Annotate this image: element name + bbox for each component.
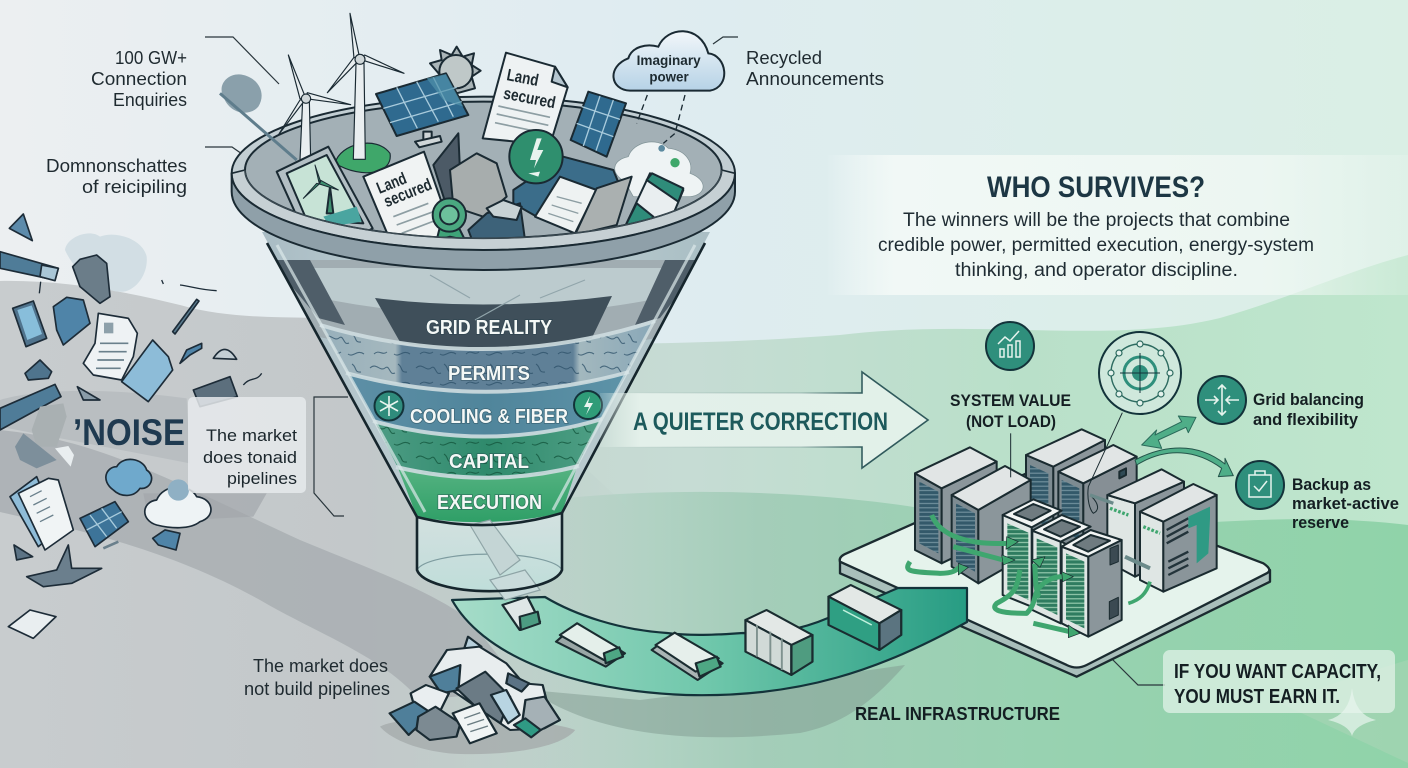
flow arrows: [908, 515, 1150, 632]
panel: who survives: [825, 155, 1408, 295]
document: land secured top: secured: [502, 84, 557, 112]
heading: noise: ’NOISE: [73, 412, 185, 453]
funnel labels: PERMITS: [448, 363, 530, 385]
callout: the market: The market: [206, 426, 297, 445]
text block: grid balancing: and flexibility: [1253, 411, 1359, 429]
rubble pile: [380, 637, 575, 754]
icon: cloud imaginary power: Imaginary: [637, 52, 701, 68]
icon: grid balancing: [1198, 376, 1246, 424]
icon: bolt small: [574, 391, 602, 419]
conveyor: [452, 588, 967, 695]
text block: recycled announcements: Recycled: [746, 48, 822, 68]
rack F: [1140, 484, 1217, 592]
funnel labels: GRID REALITY: [426, 317, 553, 339]
funnel: rim and contents: [220, 13, 735, 270]
double arrow: [1142, 416, 1196, 448]
heading: system value: [950, 392, 1071, 431]
text block: winners: thinking, and operator discipline.: [955, 260, 1238, 281]
text block: domnonschattes: Domnonschattes: [46, 156, 187, 176]
funnel: spout: [417, 513, 562, 600]
icon: target dial: [1099, 332, 1181, 414]
icon: backup: [1236, 461, 1284, 509]
document: land secured top: [483, 53, 568, 145]
heading: who survives: WHO SURVIVES?: [987, 171, 1205, 204]
text block: connection enquiries: Connection: [91, 69, 187, 89]
sparkle: [1328, 688, 1376, 736]
conveyor modules: [502, 585, 901, 680]
rack B: [952, 466, 1031, 583]
cloud right: [615, 142, 703, 197]
icon: cloud imaginary power: power: [649, 69, 689, 85]
platform: [840, 473, 1270, 677]
funnel labels: COOLING & FIBER: [410, 406, 568, 428]
connector: [1125, 557, 1150, 568]
rack E: [1107, 469, 1184, 577]
document: land secured lower: Land: [374, 169, 409, 198]
text block: backup: Backup as: [1292, 476, 1371, 494]
rack A: [915, 447, 997, 563]
text block: winners: The winners will be the projects that combine: [903, 210, 1290, 231]
curved arrow: [1135, 448, 1233, 477]
text block: grid balancing: [1253, 391, 1364, 429]
rock: [450, 153, 507, 217]
document: land secured lower: secured: [381, 175, 435, 211]
heading: system value: (NOT LOAD): [966, 413, 1056, 431]
shard: [433, 133, 461, 207]
text block: connection enquiries: 100 GW+: [115, 48, 187, 68]
text block: market does not build: not build pipelines: [244, 679, 390, 699]
text block: market does not build: [244, 656, 390, 699]
icon: chart: [986, 322, 1034, 370]
callout: earn it: YOU MUST EARN IT.: [1174, 685, 1340, 708]
rim front: [232, 170, 735, 250]
text block: winners: [878, 210, 1314, 281]
text block: recycled announcements: [746, 48, 884, 89]
icon: battery: [625, 173, 683, 230]
icon: sun: [430, 47, 481, 93]
text block: backup: [1292, 476, 1399, 532]
icon: left cloud: [220, 74, 297, 160]
icon: bolt badge: [509, 130, 563, 183]
funnel: cone: [262, 232, 710, 524]
callout: the market: [188, 397, 306, 493]
debris: noise: [0, 214, 267, 638]
link line: [1088, 413, 1122, 513]
text block: grid balancing: Grid balancing: [1253, 391, 1364, 409]
icon: solar panel: [376, 73, 468, 147]
conveyor shadow: [530, 665, 905, 737]
callout: the market: pipelines: [227, 469, 297, 488]
text block: winners: credible power, permitted execution, energy-system: [878, 235, 1314, 256]
icon: cloud imaginary power: [613, 31, 724, 91]
text block: domnonschattes: [46, 156, 187, 197]
icon: snowflake: [374, 392, 404, 420]
text block: domnonschattes: of reicipiling: [82, 177, 187, 197]
heading: system value: SYSTEM VALUE: [950, 392, 1071, 410]
text block: connection enquiries: Enquiries: [113, 90, 187, 110]
document: mid: [535, 177, 597, 233]
arrow: a quieter correction: [600, 372, 928, 468]
green rack 3: [1062, 530, 1122, 637]
dashed lines: [637, 95, 685, 143]
text block: backup: reserve: [1292, 514, 1349, 532]
icon: solar panel small: [571, 92, 626, 157]
text block: connection enquiries: [91, 48, 187, 110]
funnel labels: EXECUTION: [437, 492, 542, 514]
text block: recycled announcements: Announcements: [746, 69, 884, 89]
funnel: [220, 13, 735, 600]
slab: [575, 177, 632, 235]
text block: market does not build: The market does: [253, 656, 388, 676]
icon: ribbon: [433, 198, 466, 240]
icon: wind turbines: [278, 13, 404, 173]
green rack 1: [1003, 499, 1062, 607]
funnel labels: [410, 317, 568, 514]
icon: tablet: [277, 147, 373, 233]
funnel labels: CAPITAL: [449, 451, 529, 473]
document: land secured top: Land: [505, 65, 540, 90]
leader lines: [205, 37, 1165, 685]
callout: earn it: [1163, 650, 1395, 713]
green rack 2: [1032, 515, 1091, 623]
text block: backup: market-active: [1292, 495, 1399, 513]
arrow: a quieter correction: A QUIETER CORRECTION: [633, 408, 888, 436]
rack rear right: [1058, 445, 1137, 553]
label: real infrastructure: REAL INFRASTRUCTURE: [855, 704, 1060, 724]
blue block: [513, 157, 620, 217]
rack back: [1026, 429, 1105, 540]
rock blue: [468, 203, 525, 243]
document: land secured lower: [363, 152, 447, 243]
server racks: [908, 413, 1233, 638]
callout: the market: does tonaid: [203, 448, 297, 467]
